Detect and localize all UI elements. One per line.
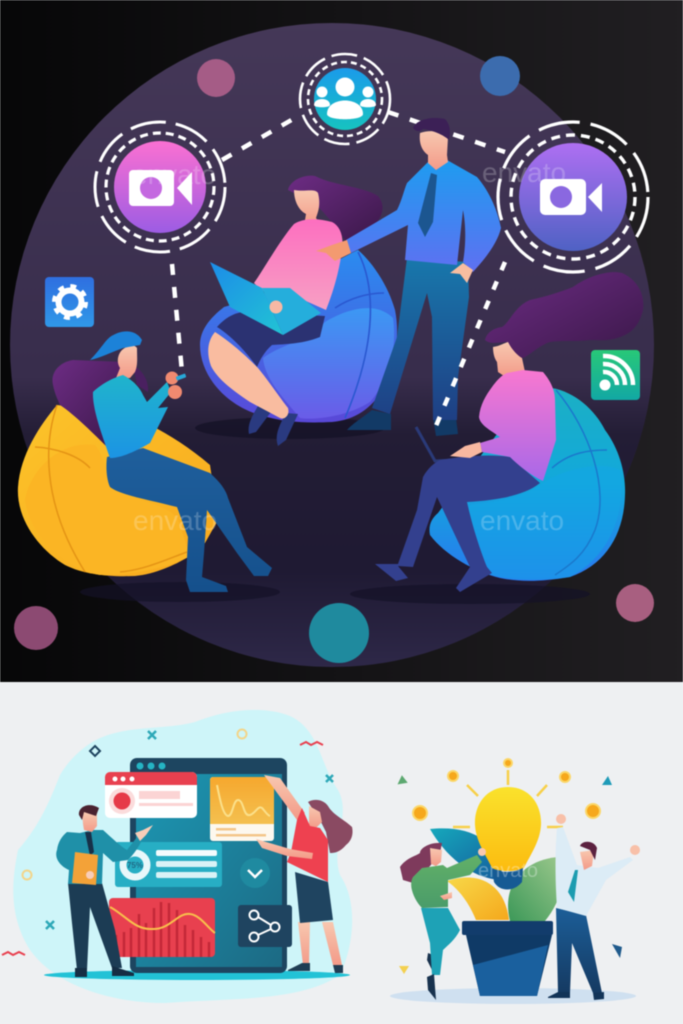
- face: [493, 342, 525, 378]
- shoes: [288, 963, 343, 973]
- shoes: [347, 410, 391, 430]
- panel: idea lightbulb illustration: [390, 759, 640, 1004]
- pants: [421, 908, 460, 975]
- beanbag: [429, 388, 625, 581]
- shirt: [287, 808, 328, 882]
- head: [580, 850, 594, 870]
- lightbulb: [475, 787, 541, 871]
- bulb socket: [492, 868, 523, 890]
- coins: [413, 759, 600, 820]
- figure: man presenting: [56, 805, 153, 977]
- plant pot: [462, 921, 553, 996]
- decorative bubble: rose: [197, 59, 235, 97]
- face: [430, 848, 442, 866]
- hand: [450, 442, 482, 458]
- trousers: [68, 883, 122, 970]
- confetti triangles: [398, 775, 622, 974]
- dashed connector to lower right: [433, 262, 505, 433]
- ground shadow: [44, 970, 350, 980]
- pink sweater: [254, 219, 343, 310]
- hair: [52, 360, 125, 447]
- hair: [485, 272, 643, 358]
- watermarks: envato: [482, 157, 566, 188]
- decorative bubble: plum lower left: [14, 606, 58, 650]
- leaves: [430, 828, 562, 921]
- figure: standing man in tie: [316, 118, 501, 436]
- shirt: [346, 160, 501, 272]
- hands: [556, 814, 566, 824]
- back foot: [427, 953, 433, 970]
- hands and phone: [166, 372, 178, 384]
- tie: [85, 832, 94, 856]
- light cyan blob background: [13, 710, 352, 1003]
- skirt: [217, 312, 325, 367]
- background disc: [10, 23, 654, 667]
- hand on hip: [450, 263, 473, 283]
- shirt: [556, 827, 633, 916]
- icon: settings gear: [45, 277, 94, 327]
- skirt: [295, 872, 333, 923]
- dashed connector lines: [172, 112, 505, 372]
- orange chart card: [210, 777, 274, 841]
- trousers: [375, 456, 540, 592]
- tablet screen: [130, 758, 287, 973]
- beanbag: [200, 250, 397, 422]
- lightbulb rays: [453, 770, 563, 827]
- panel: app design team illustration: [2, 710, 353, 1003]
- panel: dark conference scene: [0, 0, 683, 682]
- stats panel with donut: [115, 842, 222, 887]
- hair: [308, 800, 353, 853]
- trousers: [372, 258, 469, 420]
- watermark: envato: [478, 860, 538, 882]
- head: [82, 812, 97, 832]
- raised arm: [264, 775, 305, 820]
- watermarks: [132, 157, 566, 536]
- share icon box: [238, 905, 292, 947]
- figure: man cheering in tie: [548, 814, 640, 1000]
- shirt: [56, 830, 141, 884]
- watermarks: envato: [133, 505, 217, 536]
- tie: [568, 870, 578, 902]
- clipboard: [72, 852, 98, 885]
- bare leg: [208, 332, 288, 418]
- decorative bubble: teal bottom: [309, 603, 369, 663]
- shoes: [548, 992, 604, 1000]
- lower arm: [256, 839, 313, 859]
- red browser window: [105, 772, 197, 818]
- red line chart: [109, 898, 215, 957]
- stats panel with donut: 75%: [127, 861, 143, 870]
- figure: woman on teal beanbag with laptop: [350, 272, 643, 604]
- watermarks: envato: [480, 505, 564, 536]
- figure: woman with laptop on blue beanbag: [195, 176, 397, 446]
- cap: [90, 331, 142, 360]
- figure: woman on yellow beanbag with phone: [18, 331, 280, 602]
- hair: [400, 843, 442, 883]
- shoe: [427, 974, 436, 1000]
- icon: video call right: [498, 122, 648, 272]
- laptop: [262, 288, 321, 335]
- lower background band: [0, 682, 683, 1024]
- tie: [418, 173, 437, 237]
- figure: woman in green sweater: [400, 843, 486, 1000]
- face: [309, 806, 322, 828]
- decorative bubble: blue: [480, 56, 520, 96]
- head: [420, 131, 448, 170]
- hands: [135, 825, 153, 841]
- hands: [478, 848, 486, 856]
- icon: wifi signal: [591, 350, 640, 400]
- decor marks: [2, 730, 333, 955]
- shoes: [75, 966, 134, 977]
- trousers: [556, 908, 602, 993]
- sweater: [479, 370, 556, 481]
- decorative bubble: rose lower right: [616, 584, 654, 622]
- trousers: [106, 448, 272, 592]
- watermarks: envato: [132, 159, 216, 190]
- hand pointing: [316, 240, 351, 261]
- legs: [298, 922, 342, 965]
- icon: video call left: [95, 122, 225, 252]
- laptop: [416, 427, 495, 461]
- shoes: [249, 406, 271, 434]
- ground shadow: [390, 988, 636, 1004]
- hair: [288, 176, 383, 241]
- sweater: [93, 375, 171, 458]
- chevron button: [240, 858, 270, 888]
- icon: team circle: [300, 54, 390, 144]
- face: [294, 190, 320, 226]
- figure: woman with red shirt: [256, 775, 353, 973]
- sweater: [411, 855, 482, 908]
- beanbag: [18, 405, 218, 576]
- face: [116, 346, 137, 378]
